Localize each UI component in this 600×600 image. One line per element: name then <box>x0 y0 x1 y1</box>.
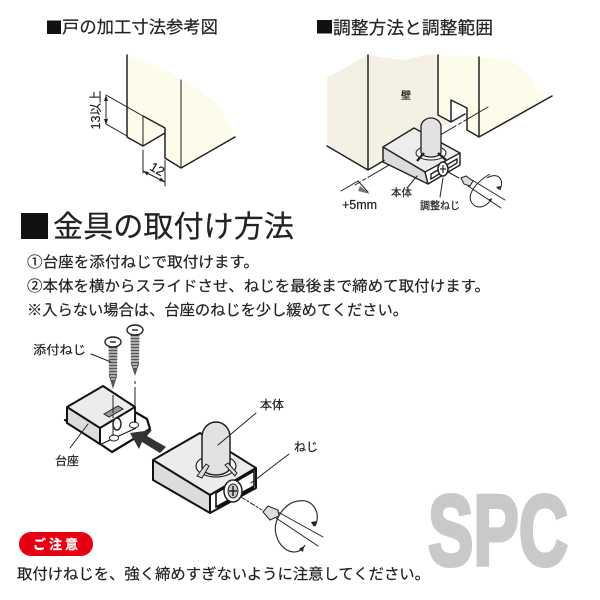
adjustment axis line <box>355 107 488 185</box>
heading: door machining dimensions: 戸の加工寸法参考図 <box>62 18 218 37</box>
dimension 12 <box>143 150 167 186</box>
screwdriver with rotation arrow <box>448 172 505 208</box>
adjustment body block <box>383 118 460 184</box>
diagram: adjustment method <box>327 55 552 212</box>
wall and door outlines <box>327 55 552 170</box>
cylinder <box>202 422 230 475</box>
screw right <box>127 325 143 423</box>
dimension 12: 12 <box>147 159 167 179</box>
screw left <box>105 337 121 436</box>
instructions text: ※入らない場合は、台座のねじを少し緩めてください。 <box>27 302 408 319</box>
main heading: how to mount the hardware: 金具の取付け方法 <box>53 211 294 244</box>
door outline <box>127 55 235 168</box>
door surface <box>438 55 552 137</box>
screw plate <box>216 471 254 507</box>
dimension 13 or more <box>89 91 143 136</box>
+5mm arrow <box>341 181 370 194</box>
base plate <box>65 412 150 452</box>
label: adjustment screw: 調整ねじ <box>420 199 460 212</box>
heading: adjustment method and range: 調整方法と調整範囲 <box>333 18 493 38</box>
label: body: 本体 <box>260 398 284 412</box>
instructions text <box>27 254 490 319</box>
screwdriver <box>241 497 323 552</box>
label: included screws: 添付ねじ <box>33 343 86 357</box>
caution text: 取付けねじを、強く締めすぎないように注意してください。 <box>17 566 430 583</box>
diagram: base and screws <box>33 325 150 468</box>
label: +5mm: +5mm <box>342 198 377 212</box>
base block <box>67 386 135 428</box>
arrow: slide body into base <box>130 430 166 453</box>
label: base: 台座 <box>55 453 79 468</box>
caution badge: ご注意 <box>33 537 78 552</box>
diagram: main body with screw and screwdriver <box>153 398 323 552</box>
body block <box>153 433 256 495</box>
instructions text: ②本体を横からスライドさせ、ねじを最後まで締めて取付けます。 <box>27 278 490 295</box>
wall surface <box>327 55 452 170</box>
label: body: 本体 <box>391 186 412 199</box>
dimension 13 or more: 13以上 <box>89 91 103 129</box>
label: screw: ねじ <box>294 440 318 454</box>
instructions text: ①台座を添付ねじで取付けます。 <box>27 254 259 271</box>
slot and holes <box>104 406 123 417</box>
caution badge <box>19 532 93 556</box>
label: wall: 壁 <box>401 90 411 102</box>
door surface <box>127 55 235 168</box>
fins <box>196 455 236 477</box>
diagram: door machining dimensions <box>89 55 235 186</box>
